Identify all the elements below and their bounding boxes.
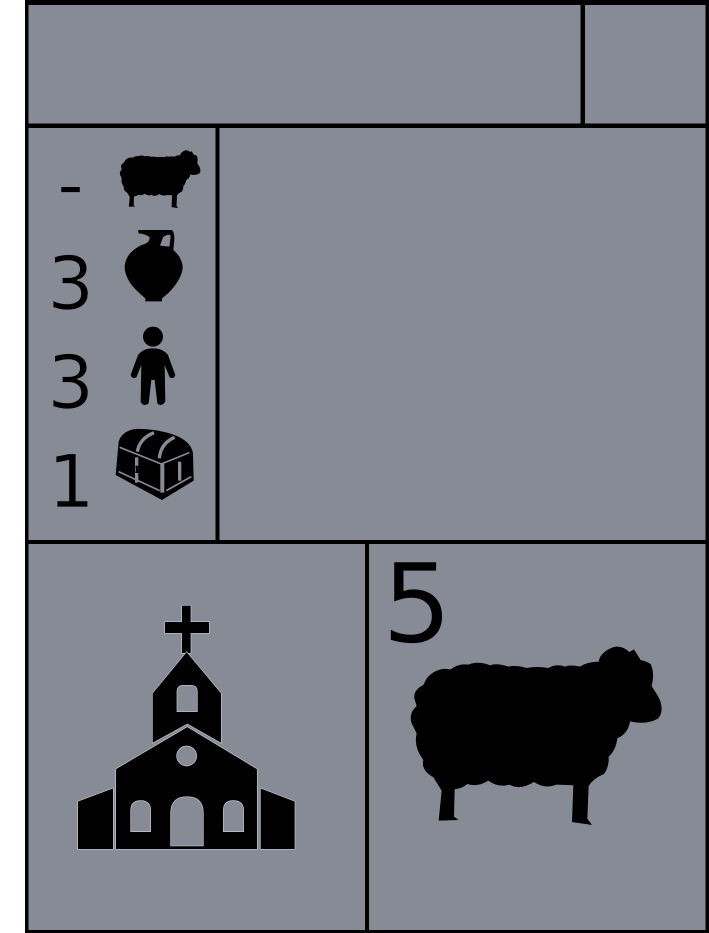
panel: church xyxy=(28,544,365,930)
population count: 3 xyxy=(48,341,94,426)
sheep count: - xyxy=(57,142,84,228)
icon: person xyxy=(131,327,175,405)
treasure count: 1 xyxy=(48,440,94,525)
panel: main empty area xyxy=(220,128,706,540)
icon: large sheep xyxy=(411,647,662,825)
panel: top banner xyxy=(28,5,580,124)
icon: treasure chest xyxy=(116,429,194,500)
reward count: 5 xyxy=(382,540,452,668)
icon: church xyxy=(78,605,295,849)
panel: top corner xyxy=(585,5,706,124)
jar count: 3 xyxy=(48,242,94,327)
panel: resource list xyxy=(28,128,216,540)
panel: sheep reward xyxy=(369,540,706,930)
icon: small sheep xyxy=(120,150,200,208)
icon: jar xyxy=(125,230,183,301)
